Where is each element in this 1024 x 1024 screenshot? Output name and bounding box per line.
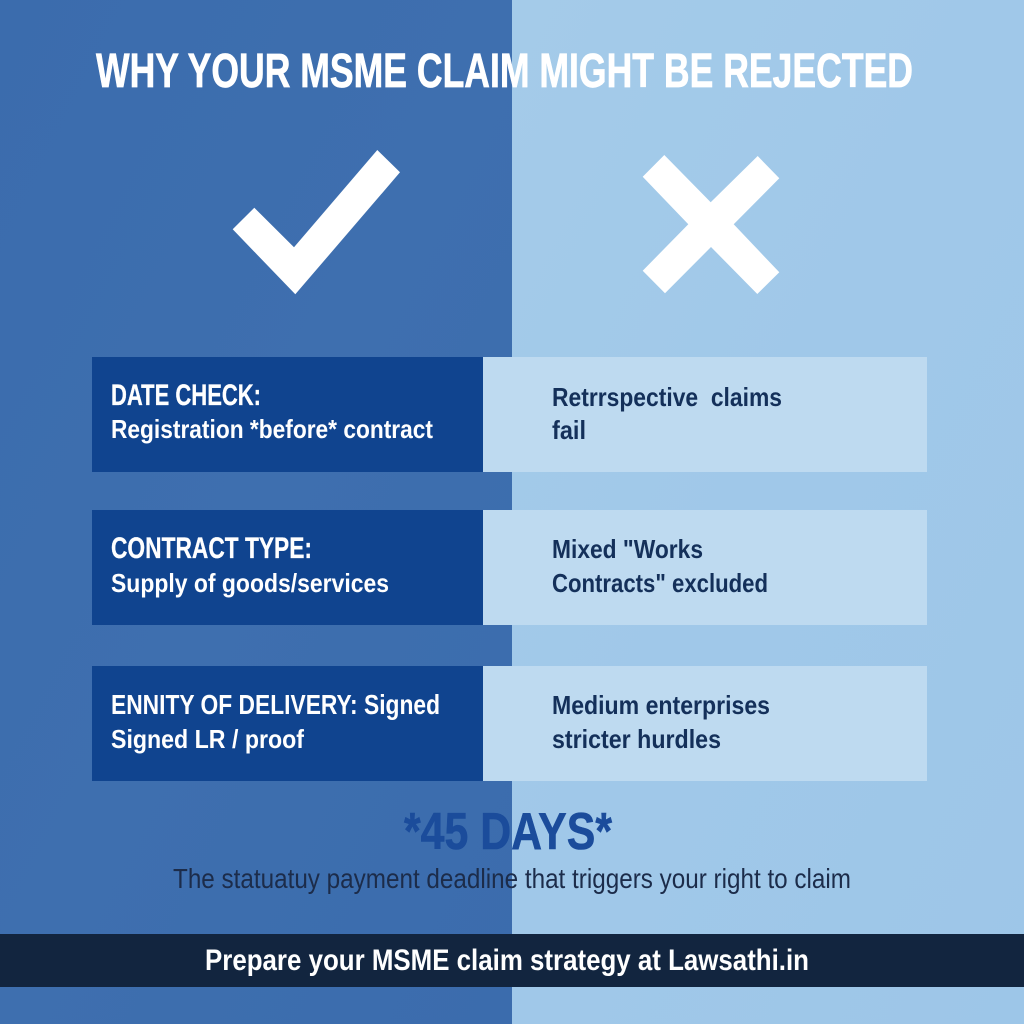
row 2: contract type xyxy=(92,510,927,625)
row 1 right cell: Retrrspective claims xyxy=(552,382,782,412)
row 2 right cell: Mixed "Works xyxy=(552,534,703,564)
row 3 left cell: ENNITY OF DELIVERY: Signed xyxy=(111,689,440,720)
row 1 left cell: Registration *before* contract xyxy=(111,414,433,444)
row 1: date check xyxy=(92,357,927,472)
row 2 left cell xyxy=(92,510,483,625)
row 2 left cell: CONTRACT TYPE: xyxy=(111,532,312,565)
footer banner xyxy=(0,934,1024,987)
footer banner: Prepare your MSME claim strategy at Lawsathi.in xyxy=(205,944,809,977)
row 3 left cell xyxy=(92,666,483,781)
row 3 left cell: Signed LR / proof xyxy=(111,724,304,754)
row 3 right cell: stricter hurdles xyxy=(552,724,721,754)
icon: check mark xyxy=(233,150,400,294)
row 2 right cell: Contracts" excluded xyxy=(552,568,768,598)
row 3 right cell: Medium enterprises xyxy=(552,690,770,720)
icon: cross mark xyxy=(643,155,779,294)
big number: 45 days: *45 DAYS* xyxy=(404,803,613,861)
right background panel xyxy=(512,0,1024,1024)
row 1 left cell xyxy=(92,357,483,472)
left background panel xyxy=(0,0,512,1024)
row 1 right cell xyxy=(483,357,927,472)
row 1 left cell: DATE CHECK: xyxy=(111,379,261,412)
row 2 left cell: Supply of goods/services xyxy=(111,568,389,598)
row 3 right cell xyxy=(483,666,927,781)
row 1 right cell: fail xyxy=(552,415,586,445)
row 2 right cell xyxy=(483,510,927,625)
deadline caption: The statuatuy payment deadline that triggers your right to claim xyxy=(173,863,851,894)
row 3: entity of delivery xyxy=(92,666,927,781)
